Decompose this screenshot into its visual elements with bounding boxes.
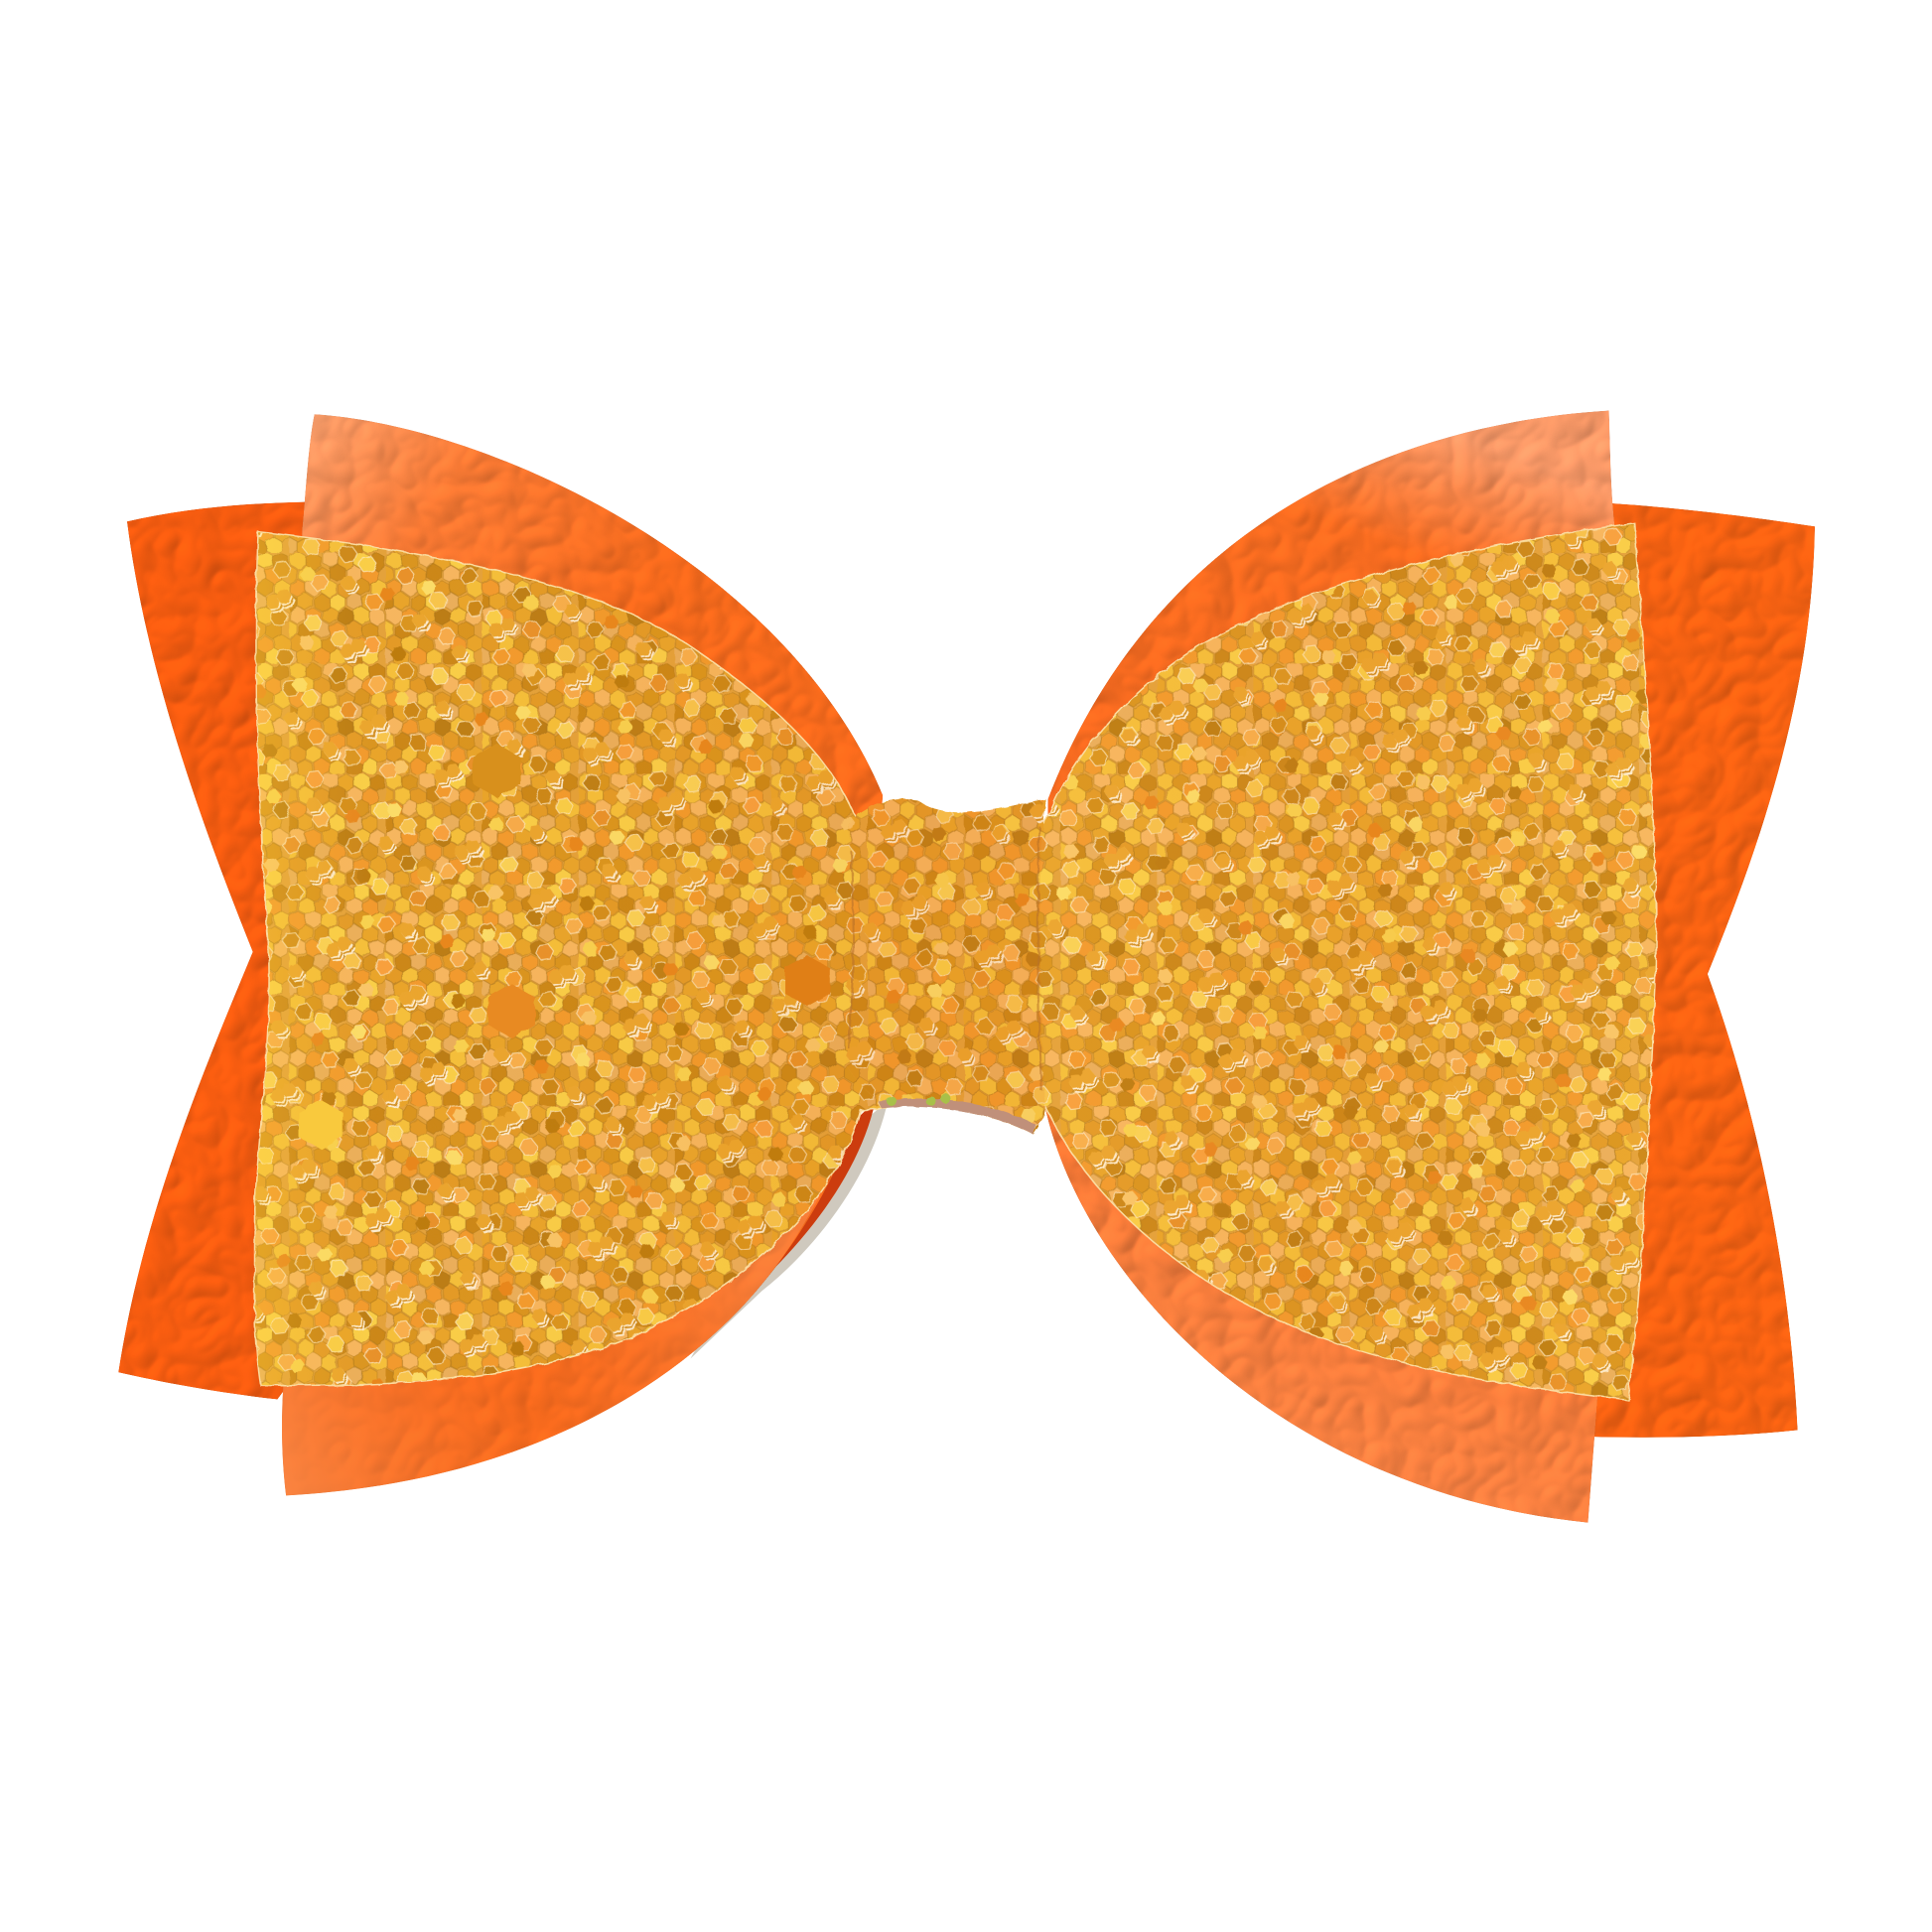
right back wing: deep orange leather bbox=[1356, 501, 1815, 1438]
left back wing: deep orange leather bbox=[118, 501, 493, 1400]
grey clip edge behind the knot bbox=[690, 1101, 888, 1359]
right glitter wing bbox=[1018, 524, 1655, 1400]
left middle wing: orange leather bbox=[282, 414, 883, 1495]
knot underside with green sequins bbox=[878, 1094, 1035, 1135]
knot fold lines bbox=[848, 826, 1041, 1091]
lower highlights, left middle wing bbox=[282, 1110, 857, 1495]
large sequins, left wing bbox=[299, 744, 830, 1149]
center knot wrap bbox=[846, 799, 1045, 1135]
left glitter wing bbox=[255, 532, 888, 1385]
right middle wing: orange leather bbox=[1045, 411, 1615, 1523]
dark red inner layer behind the knot bbox=[697, 1101, 876, 1349]
